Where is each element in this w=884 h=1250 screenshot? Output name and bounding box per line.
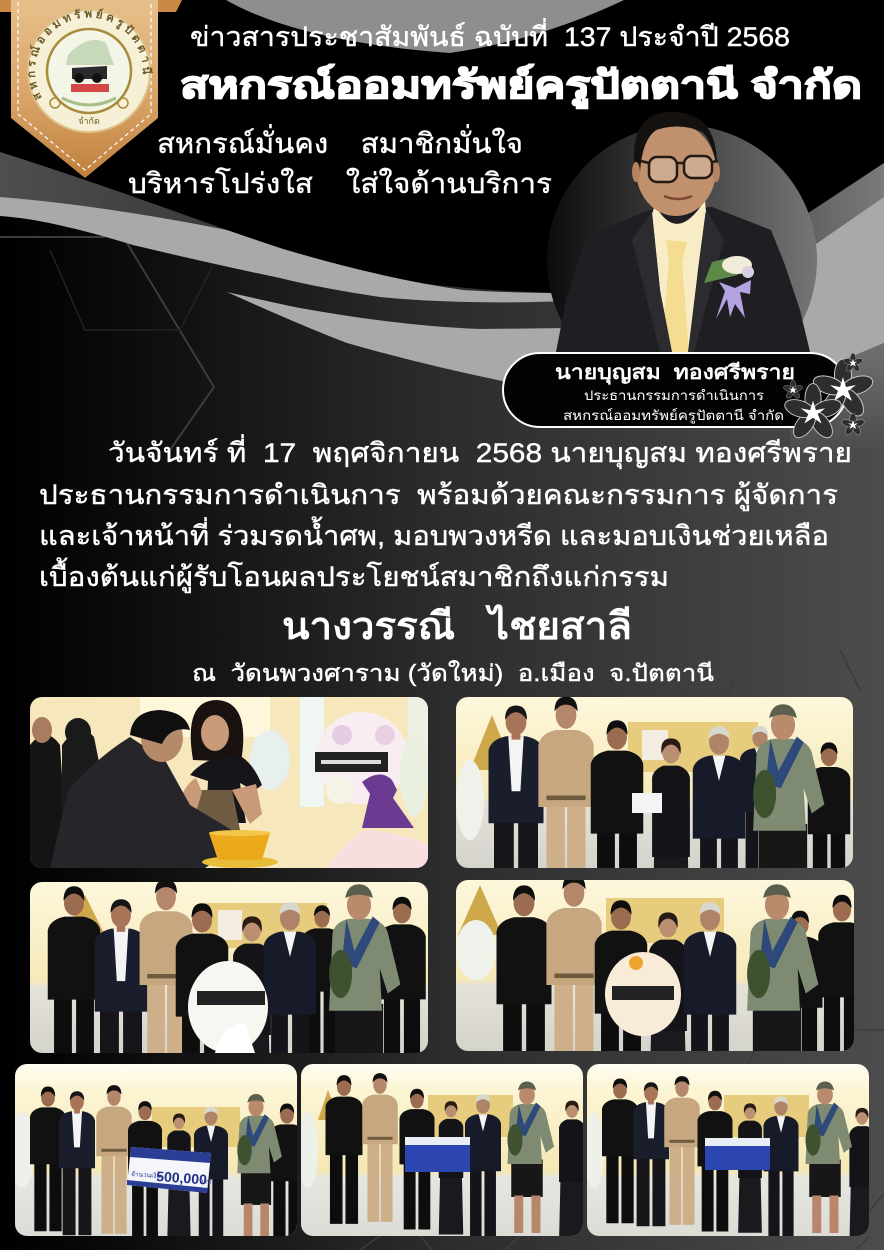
- cheque board: จำนวนเงิน: [131, 1170, 162, 1180]
- name plate: [503, 353, 847, 427]
- cheque board: 500,000: [156, 1168, 208, 1188]
- background: grey behind flowers: [790, 343, 884, 450]
- background: light swoosh lower: [227, 292, 570, 385]
- kneeling man: [50, 710, 240, 868]
- photo 2: cash handover: [456, 697, 853, 868]
- body text: ประธานกรรมการดำเนินการ พร้อมด้วยคณะกรรมการ ผู้จัดการ: [39, 480, 838, 511]
- slogan line 1: สหกรณ์มั่นคง สมาชิกมั่นใจ: [157, 124, 523, 159]
- name: นายบุญสม ทองศรีพราย: [555, 361, 795, 385]
- background: right light panel: [780, 197, 884, 370]
- wreath: [605, 952, 681, 1036]
- portrait of chairman: [556, 112, 810, 352]
- role: ประธานกรรมการดำเนินการ: [584, 388, 764, 403]
- blue board: [405, 1137, 470, 1172]
- cheque board: [127, 1147, 211, 1193]
- girl: [183, 700, 262, 830]
- photo 4: cream wreath: [456, 880, 854, 1051]
- photo 1: water pouring: [30, 697, 428, 868]
- photo 6: blue board: [298, 1064, 585, 1242]
- cheque board: บาท: [199, 1178, 211, 1186]
- slogan line 2: บริหารโปร่งใส ใส่ใจด้านบริการ: [128, 167, 552, 199]
- corsage: [704, 256, 754, 319]
- photo 7: blue board: [584, 1064, 875, 1245]
- gold ribbon with logo: [0, 0, 182, 178]
- blue board: [705, 1138, 770, 1170]
- body text: วันจันทร์ ที่ 17 พฤศจิกายน 2568 นายบุญสม ทองศรีพราย: [108, 434, 852, 470]
- photo 3: white wreath: [30, 882, 428, 1053]
- body text: เบื้องต้นแก่ผู้รับโอนผลประโยชน์สมาชิกถึงแก่กรรม: [39, 557, 669, 593]
- portrait backdrop disc: [547, 125, 817, 395]
- logo seal: สหกรณ์ออมทรัพย์ครูปัตตานี: [28, 8, 153, 100]
- wreath: [188, 961, 268, 1053]
- background: top grey swoosh: [226, 0, 624, 53]
- body text: [39, 434, 852, 593]
- icon: flowers: [782, 353, 875, 442]
- photo 5: cheque 500,000: [15, 1064, 297, 1236]
- body text: และเจ้าหน้าที่ ร่วมรดน้ำศพ, มอบพวงหรีด และมอบเงินช่วยเหลือ: [39, 516, 829, 551]
- deceased member name: นางวรรณี ไชยสาลี: [282, 604, 632, 648]
- gold bowl: [202, 830, 278, 868]
- background: dark wedge: [0, 152, 227, 230]
- glasses: [641, 156, 718, 182]
- header: newsletter issue: ข่าวสารประชาสัมพันธ์ ฉบับที่ 137 ประจำปี 2568: [190, 18, 790, 52]
- background: light swoosh upper: [0, 197, 570, 302]
- background: black header field: [0, 0, 884, 293]
- wreath: [315, 712, 428, 828]
- background: right swoosh band: [790, 163, 884, 262]
- location: ณ วัดนพวงศาราม (วัดใหม่) อ.เมือง จ.ปัตตานี: [192, 660, 714, 686]
- header: organisation name: สหกรณ์ออมทรัพย์ครูปัตตานี จำกัด: [180, 64, 862, 109]
- logo seal: จำกัด: [78, 116, 100, 126]
- organisation: สหกรณ์ออมทรัพย์ครูปัตตานี จำกัด: [563, 407, 784, 424]
